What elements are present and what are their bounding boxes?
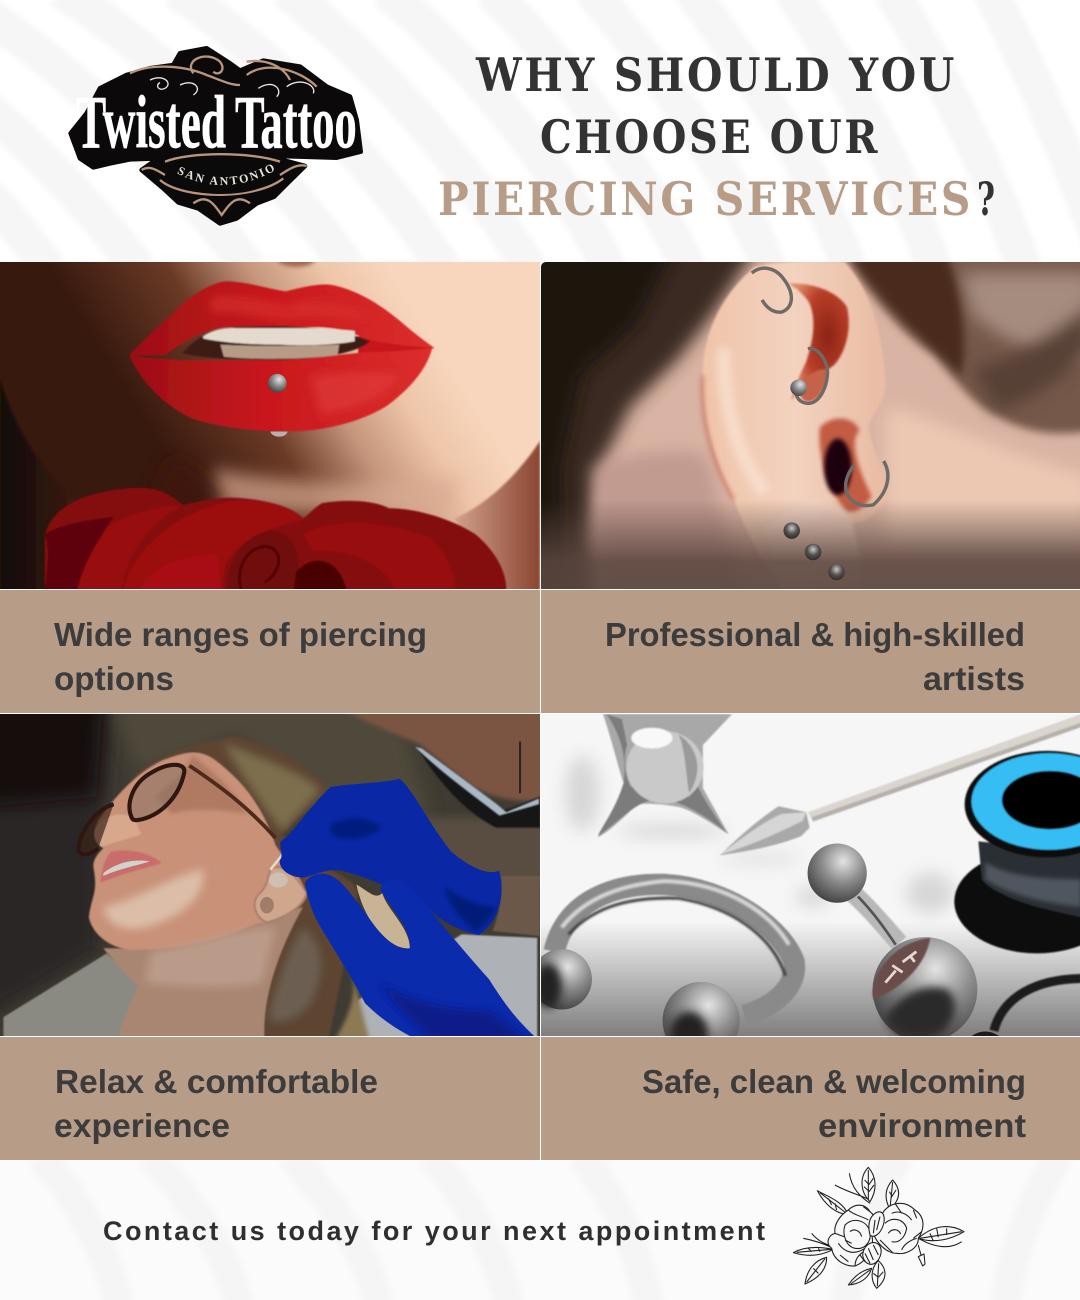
ear rings and studs <box>752 268 888 580</box>
logo wordmark: Tattoo <box>235 81 357 164</box>
caption: professional artists: artists <box>923 660 1025 697</box>
ear canal <box>819 419 872 512</box>
caption: wide ranges <box>54 616 427 697</box>
logo wordmark: Twisted <box>76 81 226 164</box>
red roses <box>45 488 506 600</box>
woman's hair <box>131 736 372 1047</box>
upper and lower lips <box>129 281 435 431</box>
gap between hands <box>356 884 410 948</box>
title: CHOOSE OUR <box>540 110 880 164</box>
caption: relax: Relax & comfortable <box>55 1063 378 1100</box>
black ring <box>972 973 1080 1036</box>
caption: safe clean: environment <box>818 1107 1026 1144</box>
woman's face and neck <box>89 752 307 1047</box>
contact line: Contact us today for your next appointment <box>103 1216 765 1246</box>
ear <box>698 262 886 554</box>
blurred studio background <box>0 693 114 1024</box>
caption: safe clean <box>642 1063 1026 1144</box>
spike barbell <box>720 714 1080 855</box>
nose <box>94 815 141 847</box>
caption: safe clean: Safe, clean & welcoming <box>642 1063 1026 1100</box>
caption: relax <box>54 1063 378 1144</box>
horseshoe ring <box>531 881 794 1059</box>
caption: wide ranges: options <box>54 660 174 697</box>
ear interior <box>789 283 849 400</box>
curved belly bar <box>808 843 977 1042</box>
bottom shadow fade <box>541 504 1080 589</box>
hair right <box>844 255 1080 433</box>
caption: professional artists <box>605 616 1025 697</box>
soft shadows <box>565 755 954 914</box>
left bloom <box>828 1205 875 1266</box>
caption: relax: experience <box>54 1107 230 1144</box>
ear <box>255 867 307 922</box>
logo light filigree <box>150 78 314 97</box>
title: PIERCING SERVICES <box>438 172 973 226</box>
smile with braces <box>101 850 162 883</box>
stems <box>803 1173 962 1265</box>
logo black badge <box>71 48 361 223</box>
leaves <box>862 1167 875 1202</box>
caption: wide ranges: Wide ranges of piercing <box>54 616 427 653</box>
photo: ear with multiple piercings <box>541 262 1080 589</box>
caption bands <box>0 590 1080 1160</box>
blue gloves and tool <box>270 779 540 1047</box>
piercer's face and mask <box>344 711 544 828</box>
logo: Twisted Tattoo San Antonio <box>68 46 363 226</box>
logo san antonio banner: SAN ANTONIO <box>177 164 274 186</box>
title: WHY SHOULD YOU <box>475 48 957 102</box>
glasses <box>79 765 276 854</box>
logo copper scrolls <box>130 57 317 215</box>
star flesh tunnel <box>598 714 732 837</box>
labret piercing studs <box>268 374 288 437</box>
caption: professional artists: Professional & high-skilled <box>605 616 1025 653</box>
tattooed forearm <box>492 876 540 936</box>
title <box>438 48 997 226</box>
icon: floral line drawing <box>793 1167 964 1288</box>
black and blue tunnel <box>954 751 1080 953</box>
photo: ear piercing procedure <box>0 714 540 1036</box>
centre petals <box>863 1243 881 1264</box>
chair <box>2 953 138 1036</box>
right bloom <box>873 1203 923 1254</box>
photo: red lips with piercings <box>0 252 540 600</box>
title: ? <box>977 172 997 226</box>
photo: assorted body jewellery <box>541 714 1080 1036</box>
hair left <box>541 262 764 589</box>
logo san antonio banner <box>177 164 274 194</box>
neck shadow left and right of jaw <box>0 380 57 589</box>
